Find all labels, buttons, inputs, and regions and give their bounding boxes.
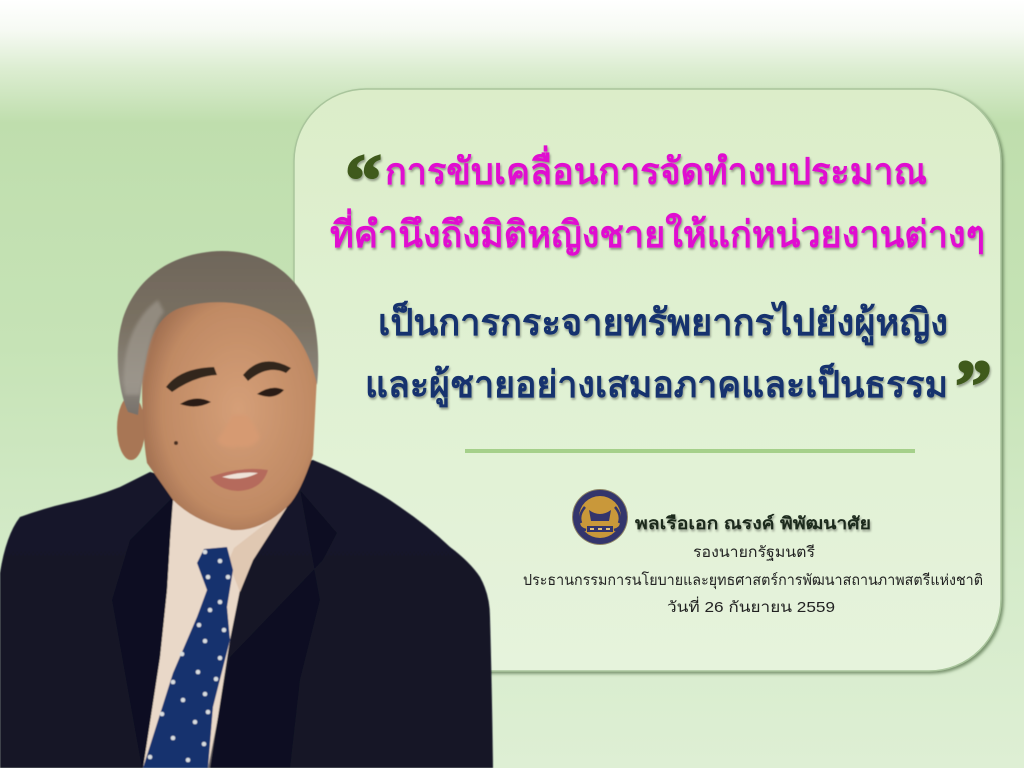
- suit jacket: [0, 460, 493, 768]
- shirt: [143, 500, 287, 768]
- mole: [174, 441, 178, 445]
- panel: quote card: [294, 89, 1001, 671]
- head: [142, 288, 317, 530]
- quote body in navy: [365, 299, 948, 408]
- nose: [217, 415, 260, 447]
- icon: government seal: [572, 489, 628, 545]
- quote body in navy: และผู้ชายอย่างเสมอภาคและเป็นธรรม: [365, 361, 948, 408]
- quote body in navy: เป็นการกระจายทรัพยากรไปยังผู้หญิง: [378, 299, 948, 346]
- temple grey: [124, 300, 164, 395]
- ear: [117, 396, 145, 460]
- quote heading in magenta: [330, 145, 985, 256]
- shirt collar shade: [228, 507, 287, 592]
- portrait of the speaker: [0, 251, 493, 768]
- necktie: [143, 547, 233, 768]
- hair: [118, 251, 318, 415]
- date: วันที่ 26 กันยายน 2559: [667, 596, 835, 616]
- jacket lapels: [112, 498, 172, 768]
- opening quotation mark: “: [345, 140, 382, 222]
- eyes: [180, 388, 284, 407]
- signatory role: รองนายกรัฐมนตรี: [693, 544, 815, 561]
- divider line: [465, 449, 915, 453]
- signature block: [523, 513, 983, 616]
- mouth: [210, 469, 268, 491]
- quote heading in magenta: การขับเคลื่อนการจัดทำงบประมาณ: [385, 145, 927, 192]
- quote heading in magenta: ที่คำนึงถึงมิติหญิงชายให้แก่หน่วยงานต่างๆ: [330, 208, 985, 256]
- signatory name: พลเรือเอก ณรงค์ พิพัฒนาศัย: [635, 513, 871, 533]
- closing quotation mark: ”: [955, 346, 992, 428]
- signatory committee: ประธานกรรมการนโยบายและยุทธศาสตร์การพัฒนาสถานภาพสตรีแห่งชาติ: [523, 571, 983, 590]
- eyebrows: [166, 361, 291, 392]
